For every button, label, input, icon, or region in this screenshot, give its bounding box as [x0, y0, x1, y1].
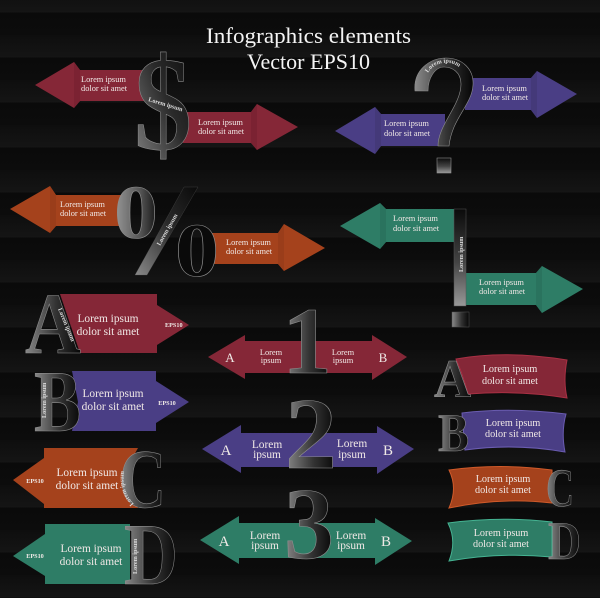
purple arrow right: Lorem ipsum: [482, 84, 527, 93]
red arrow left: dolor sit amet: [81, 84, 128, 93]
banner C: EPS10: [26, 478, 44, 485]
percent sign: [114, 171, 219, 293]
banner A: dolor sit amet: [77, 326, 140, 338]
small letter B: B: [438, 403, 469, 463]
banner B: EPS10: [158, 400, 176, 407]
double arrow 2: Lorem: [252, 439, 282, 451]
orange arrow right: dolor sit amet: [226, 247, 273, 256]
ribbon B: dolor sit amet: [485, 429, 541, 440]
banner A: [25, 275, 189, 372]
green arrow right: [465, 266, 583, 313]
green arrow left: Lorem ipsum: [393, 214, 438, 223]
double arrow 1: B: [379, 350, 388, 365]
title: Vector EPS10: [247, 49, 370, 74]
banner B: dolor sit amet: [82, 401, 145, 413]
double arrow 3: Lorem: [250, 530, 280, 542]
double arrow 1: [208, 288, 407, 394]
banner B: Lorem ipsum: [82, 388, 144, 400]
letter A: Lorem ipsum: [56, 307, 76, 343]
letter B: Lorem ipsum: [41, 382, 48, 418]
double arrow 2: [202, 378, 414, 491]
double arrow 2: ipsum: [253, 449, 281, 461]
purple arrow left: [335, 107, 445, 154]
purple arrow right: dolor sit amet: [482, 93, 529, 102]
red arrow right: [183, 104, 298, 150]
red arrow right: dolor sit amet: [198, 127, 245, 136]
dollar sign: $: [134, 30, 192, 178]
ribbon D: Lorem ipsum: [474, 528, 528, 539]
banner D: EPS10: [26, 553, 44, 560]
ribbon B: [438, 403, 566, 463]
banner A: EPS10: [165, 322, 183, 329]
purple arrow right: [465, 71, 577, 118]
double arrow 1: Lorem: [332, 348, 355, 357]
banner C: Lorem ipsum: [56, 467, 118, 479]
ribbon D: [448, 511, 581, 571]
red arrow right: Lorem ipsum: [198, 118, 243, 127]
green arrow left: dolor sit amet: [393, 224, 440, 233]
orange arrow left: [10, 186, 122, 233]
banner D: [13, 507, 178, 598]
exclamation mark: [452, 209, 469, 327]
ribbon A: [434, 349, 567, 409]
question mark: Lorem ipsum: [424, 58, 460, 73]
numeral 2: 2: [285, 378, 337, 491]
question mark: [414, 58, 474, 174]
title: [206, 23, 411, 74]
double arrow 1: ipsum: [333, 356, 354, 365]
double arrow 3: [200, 468, 412, 581]
title: Infographics elements: [206, 23, 411, 48]
green arrow right: dolor sit amet: [479, 287, 526, 296]
letter C: C: [119, 433, 166, 526]
double arrow 3: A: [219, 534, 230, 550]
ribbon D: dolor sit amet: [473, 539, 529, 550]
percent group: [10, 171, 325, 293]
double arrow 2: ipsum: [338, 449, 366, 461]
double arrow 3: Lorem: [336, 530, 366, 542]
small letter A: A: [434, 349, 471, 409]
numeral 3: 3: [284, 468, 334, 581]
orange arrow left: dolor sit amet: [60, 209, 107, 218]
ribbon C: dolor sit amet: [475, 485, 531, 496]
ribbon A: Lorem ipsum: [483, 364, 537, 375]
percent sign: 0: [114, 171, 158, 255]
letter C: Lorem ipsum: [120, 471, 134, 507]
exclamation group: [340, 203, 583, 327]
double arrow 2: B: [383, 443, 393, 459]
exclamation mark: Lorem ipsum: [458, 236, 465, 272]
orange arrow right: Lorem ipsum: [226, 238, 271, 247]
double arrow 2: Lorem: [337, 438, 367, 450]
double arrow 3: B: [381, 534, 391, 550]
percent sign: 0: [175, 209, 219, 293]
dollar sign: Lorem ipsum: [147, 96, 184, 114]
orange arrow right: [212, 224, 325, 271]
red arrow left: Lorem ipsum: [81, 75, 126, 84]
letter B: B: [34, 354, 81, 451]
dollar group: [35, 30, 298, 178]
banner C: dolor sit amet: [56, 480, 119, 492]
numeral 1: 1: [282, 288, 332, 394]
question mark group: [335, 58, 577, 174]
ribbon B: Lorem ipsum: [486, 418, 540, 429]
double arrow 1: ipsum: [261, 356, 282, 365]
banner B: [34, 354, 189, 451]
double arrow 1: Lorem: [260, 348, 283, 357]
orange arrow left: Lorem ipsum: [60, 200, 105, 209]
double arrow 2: A: [221, 443, 232, 459]
double arrow 3: ipsum: [337, 540, 365, 552]
banner A: Lorem ipsum: [77, 313, 139, 325]
green arrow right: Lorem ipsum: [479, 278, 524, 287]
double arrow 3: ipsum: [251, 540, 279, 552]
banner D: Lorem ipsum: [60, 543, 122, 555]
percent sign: Lorem ipsum: [156, 212, 180, 247]
banner D: dolor sit amet: [60, 556, 123, 568]
ribbon C: [449, 458, 574, 518]
small letter C: C: [546, 458, 574, 518]
ribbon A: dolor sit amet: [482, 376, 538, 387]
double arrow 1: A: [225, 350, 235, 365]
letter A: A: [25, 275, 81, 372]
red arrow left: [35, 62, 145, 108]
green arrow left: [340, 203, 456, 249]
banner C: [13, 433, 166, 526]
small letter D: D: [548, 511, 581, 571]
letter D: Lorem ipsum: [132, 538, 139, 574]
purple arrow left: dolor sit amet: [384, 129, 431, 138]
ribbon C: Lorem ipsum: [476, 474, 530, 485]
purple arrow left: Lorem ipsum: [384, 119, 429, 128]
